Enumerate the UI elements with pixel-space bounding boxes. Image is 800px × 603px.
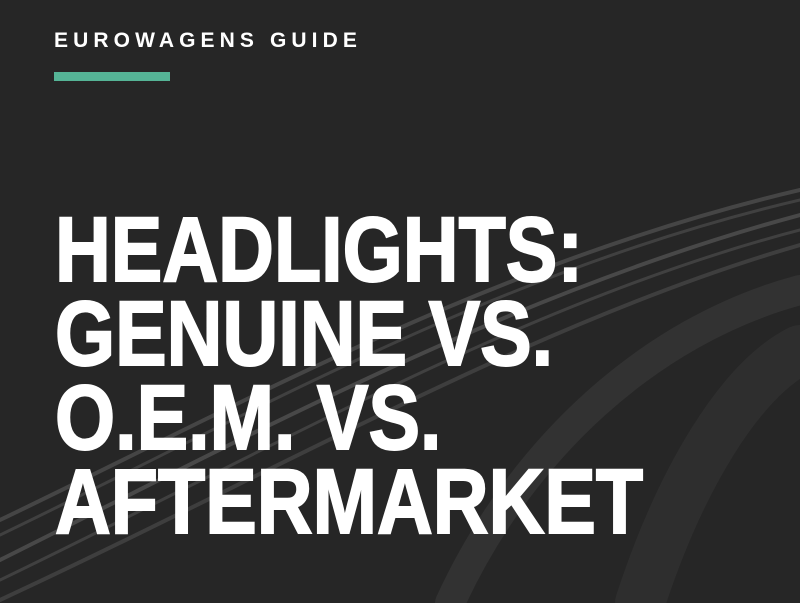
title: O.E.M. VS. (55, 367, 441, 469)
accent bar (54, 72, 170, 81)
title: GENUINE VS. (55, 283, 553, 385)
title (55, 199, 644, 553)
title: HEADLIGHTS: (55, 199, 583, 301)
header label: EUROWAGENS GUIDE (54, 29, 362, 52)
title: AFTERMARKET (55, 451, 643, 553)
